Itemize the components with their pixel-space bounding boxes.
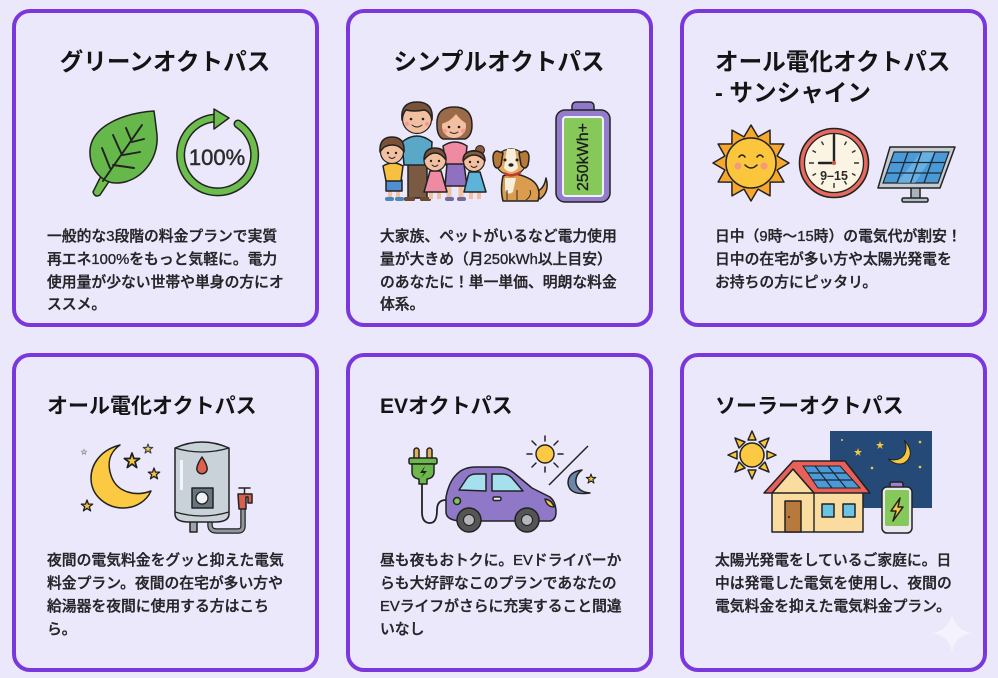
text block: description: ススメ。 (47, 297, 106, 313)
panel: オール電化オクトパス (14, 355, 317, 670)
heading: オール電化オクトパス - サンシャイン (715, 49, 950, 107)
icon: leaf (90, 111, 157, 196)
panel: ソーラーオクトパス (682, 355, 985, 670)
icon: moon and stars (81, 444, 160, 511)
icon: sparkle watermark (933, 614, 971, 652)
text block: description (47, 227, 284, 313)
panel: シンプルオクトパス (348, 11, 651, 325)
text block: description (380, 227, 617, 313)
heading: オール電化オクトパス - サンシャイン: オール電化オクトパス (715, 49, 950, 76)
icon: clock 9-15: 9–15 (820, 169, 848, 183)
heading: ソーラーオクトパス: ソーラーオクトパス (715, 395, 904, 418)
panel: オール電化オクトパス - サンシャイン (682, 11, 985, 325)
icon: dog (493, 149, 547, 201)
icon: smiling sun (713, 125, 789, 201)
icon: plug and cord (409, 448, 455, 523)
heading: EVオクトパス: EVオクトパス (380, 395, 513, 418)
icon: night sky (830, 431, 932, 508)
text block: description: 給湯器を夜間に使用する方はこち (47, 598, 269, 615)
icon: solar panel (878, 147, 955, 202)
text block: description: 一般的な3段階の料金プランで実質 (47, 227, 277, 245)
panel: グリーンオクトパス (14, 11, 317, 325)
icon: 250kWh+ battery: 250kWh+ (575, 123, 592, 191)
text block: description: お持ちの方にピッタリ。 (715, 274, 877, 291)
text block: description: 夜間の電気料金をグッと抑えた電気 (47, 552, 284, 569)
text block: description: 日中の在宅が多い方や太陽光発電を (715, 250, 952, 268)
text block: description (380, 552, 622, 638)
text block: description: EVライフがさらに充実すること間違 (380, 597, 622, 615)
heading: シンプルオクトパス: シンプルオクトパス (393, 49, 605, 76)
text block: description: 電気料金を抑えた電気料金プラン。 (715, 598, 951, 615)
text block: description: 再エネ100%をもっと気軽に。電力 (47, 251, 277, 268)
icon: water heater (175, 442, 252, 532)
icon: electric car (446, 467, 556, 532)
text block: description: 日中（9時～15時）の電気代が割安！ (715, 227, 962, 245)
icon: 100% renewable arrow (181, 109, 255, 192)
text block: description: のあなたに！単一単価、明朗な料金 (380, 274, 617, 291)
icon: house with solar panels (764, 461, 870, 532)
icon: sun (728, 431, 776, 479)
text block: description: 太陽光発電をしているご家庭に。日 (715, 551, 951, 569)
heading: グリーンオクトパス: グリーンオクトパス (60, 48, 270, 76)
icon: 250kWh+ battery (556, 102, 610, 202)
icon: home battery (882, 482, 912, 533)
text block: description: 量が大きめ（月250kWh以上目安） (380, 250, 612, 268)
text block: description: 中は発電した電気を使用し、夜間の (715, 575, 952, 592)
text block: description: 使用量が少ない世帯や単身の方にオ (47, 273, 284, 291)
text block: description (715, 551, 952, 615)
heading: オール電化オクトパス: オール電化オクトパス (47, 395, 257, 418)
icon: clock 9-15 (800, 128, 868, 198)
text block: description (715, 227, 962, 291)
text block: description: 体系。 (380, 296, 424, 313)
text block: description: いなし (380, 621, 424, 638)
text block: description (47, 552, 284, 638)
icon: day and night (527, 436, 596, 494)
panel: EVオクトパス (348, 355, 651, 670)
text block: description: ら。 (47, 621, 77, 638)
icon: family (380, 102, 486, 201)
heading: オール電化オクトパス - サンシャイン: - サンシャイン (715, 81, 871, 107)
text block: description: 料金プラン。夜間の在宅が多い方や (47, 574, 283, 592)
text block: description: らも大好評なこのプランであなたの (380, 575, 617, 592)
icon: 100% renewable arrow: 100% (189, 145, 245, 170)
text block: description: 昼も夜もおトクに。EVドライバーか (380, 552, 622, 569)
text block: description: 大家族、ペットがいるなど電力使用 (380, 227, 617, 245)
